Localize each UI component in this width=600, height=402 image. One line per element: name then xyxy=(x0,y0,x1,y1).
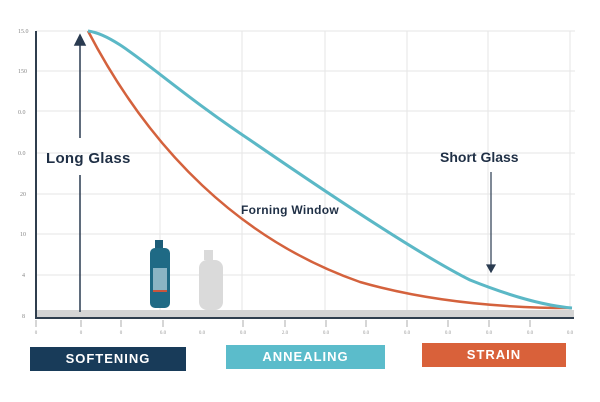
arrow: short glass xyxy=(487,172,495,272)
legend: annealing: ANNEALING xyxy=(262,349,349,364)
y axis labels: 10 xyxy=(20,232,26,238)
curve: orange xyxy=(88,31,572,308)
legend: annealing xyxy=(226,345,385,369)
legend: softening: SOFTENING xyxy=(66,351,150,366)
arrow: long glass xyxy=(75,35,85,312)
chart: 0.0 xyxy=(363,331,370,336)
y axis labels xyxy=(18,29,28,320)
chart: 0.0 xyxy=(486,331,493,336)
chart: 6.0 xyxy=(160,331,167,336)
chart: 0.0 xyxy=(567,331,574,336)
icon: blue bottle xyxy=(150,240,170,308)
label: forming window: Forning Window xyxy=(241,203,339,217)
chart: 2.0 xyxy=(282,331,289,336)
floor band xyxy=(36,310,574,318)
y axis labels: 4 xyxy=(22,273,25,279)
icon: grey bottle xyxy=(199,250,223,310)
y axis labels: 8 xyxy=(22,314,25,320)
axes xyxy=(36,31,574,319)
chart: 0.0 xyxy=(240,331,247,336)
legend: strain xyxy=(422,343,566,367)
chart: 0 xyxy=(80,331,83,336)
chart: 0.0 xyxy=(199,331,206,336)
y axis labels: 0.0 xyxy=(18,151,26,157)
label: long glass: Long Glass xyxy=(46,150,131,167)
y axis labels: 150 xyxy=(18,69,27,75)
legend: softening xyxy=(30,347,186,371)
legend: strain: STRAIN xyxy=(467,347,521,362)
x axis ticks/labels xyxy=(36,320,530,327)
y axis labels: 0.0 xyxy=(18,110,26,116)
chart: 0.0 xyxy=(404,331,411,336)
curve: teal xyxy=(88,31,572,308)
chart: 0 xyxy=(120,331,123,336)
chart: 0.0 xyxy=(445,331,452,336)
chart: 0.0 xyxy=(527,331,534,336)
chart: 0.0 xyxy=(323,331,330,336)
label: short glass: Short Glass xyxy=(440,149,519,165)
chart: 0 xyxy=(35,331,38,336)
y axis labels: 15.0 xyxy=(18,29,28,35)
y axis labels: 20 xyxy=(20,192,26,198)
